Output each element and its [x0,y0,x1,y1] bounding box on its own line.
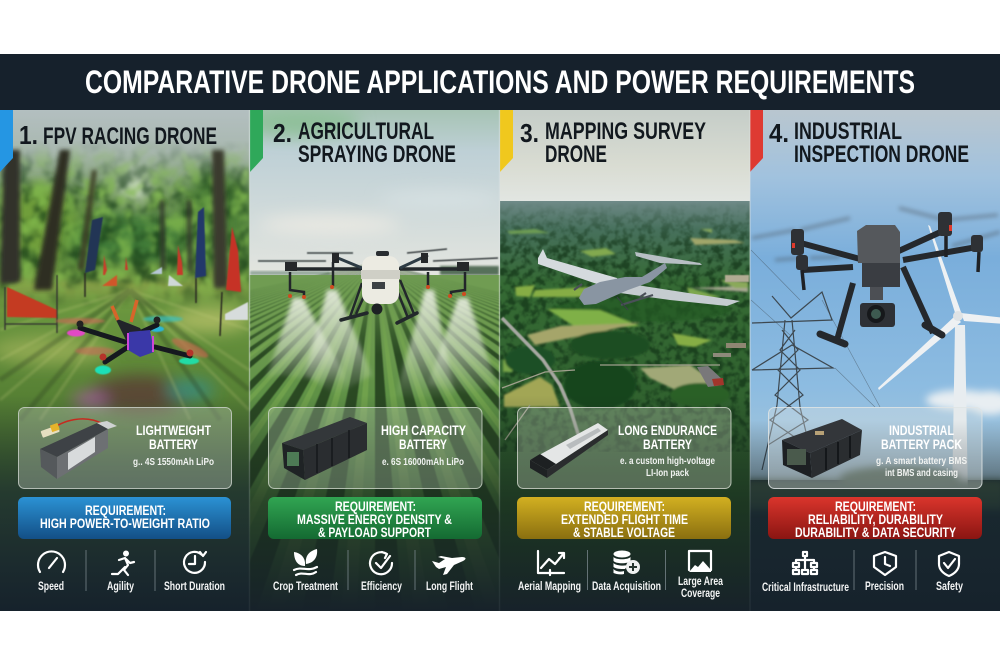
battery card: long endurance: LI-Ion pack [646,467,689,479]
feature: Large Area Coverage [678,551,723,600]
battery card: industrial pack: int BMS and casing [885,467,958,479]
battery card: high capacity [268,408,482,488]
feature: Safety: Safety [936,581,963,593]
feature: Data Acquisition: Data Acquisition [592,581,661,593]
feature: Speed: Speed [38,581,64,593]
panel: agricultural spraying drone [250,110,500,592]
feature: Long Flight: Long Flight [426,581,473,593]
requirement banner: red: REQUIREMENT: [835,499,916,514]
feature: Long Flight [426,556,473,593]
feature: Crop Treatment: Crop Treatment [273,581,338,593]
heading: 2. Agricultural Spraying Drone: AGRICULTURAL [298,118,434,145]
heading: 3. Mapping Survey Drone [520,118,706,168]
requirement banner: blue: REQUIREMENT: [85,503,166,518]
battery card: industrial pack: INDUSTRIAL [889,423,954,438]
requirement banner: green: REQUIREMENT: [335,499,416,514]
heading: 2. Agricultural Spraying Drone: 2. [273,118,292,148]
battery card: high capacity: BATTERY [399,437,447,452]
feature: Data Acquisition [592,550,661,593]
requirement banner: yellow [517,497,731,540]
feature: Short Duration: Short Duration [164,581,225,593]
scene: forest race course [0,110,250,552]
requirement banner: yellow: EXTENDED FLIGHT TIME [561,512,688,527]
bottom shade [750,426,1000,512]
heading: 1. FPV Racing Drone: 1. [19,120,38,150]
requirement banner: green [268,497,482,540]
battery card: industrial pack [768,408,982,488]
feature: Speed [38,551,65,593]
heading: 3. Mapping Survey Drone: MAPPING SURVEY [545,118,706,145]
requirement banner: blue: HIGH POWER-TO-WEIGHT RATIO [40,516,210,531]
wind turbine [878,225,1000,500]
feature: Large Area Coverage: Large Area [678,576,723,588]
corner tab: green [250,110,263,172]
heading: 4. Industrial Inspection Drone: 4. [769,118,789,148]
icon: network [793,552,817,574]
heading: 3. Mapping Survey Drone: 3. [520,118,539,148]
icon: shield check [939,552,959,576]
panel: FPV racing drone [0,110,250,611]
icon: landscape frame [689,551,711,572]
corner tab: red [750,110,763,172]
battery card: lightweight [18,408,232,488]
panel separators [249,110,751,611]
corner tab: yellow [500,110,513,172]
tree line [745,466,1000,510]
requirement banner: red [768,497,982,540]
requirement banner: red: RELIABILITY, DURABILITY [808,512,943,527]
heading: 1. FPV Racing Drone [19,120,217,150]
battery card: long endurance: LONG ENDURANCE [618,423,717,438]
feature: Large Area Coverage: Coverage [681,588,720,600]
requirement banner: yellow: REQUIREMENT: [584,499,665,514]
requirement banner: yellow: & STABLE VOLTAGE [573,525,675,540]
panel: mapping survey drone [500,110,750,611]
feature: Crop Treatment [273,549,338,593]
scene: crop field and sky [250,110,500,586]
requirement banner: green: MASSIVE ENERGY DENSITY & [297,512,452,527]
icon: slim Li-Ion pack [530,423,608,478]
scene: aerial landscape [500,110,750,554]
bottom shade [500,395,750,611]
requirement banner: red: DURABILITY & DATA SECURITY [795,525,956,540]
bottom shade [0,395,250,611]
heading: 2. Agricultural Spraying Drone [273,118,456,168]
feature: Safety [936,552,963,593]
icon: database plus [614,550,640,574]
battery card: lightweight: LIGHTWEIGHT [136,423,212,438]
battery card: long endurance: BATTERY [643,437,692,452]
battery card: industrial pack: BATTERY PACK [881,437,962,452]
battery card: lightweight: g.. 4S 1550mAh LiPo [133,456,214,468]
panel: industrial inspection drone [745,110,1000,611]
drone: FPV quadcopter [55,300,210,374]
heading: 4. Industrial Inspection Drone [769,118,969,168]
feature: Aerial Mapping [518,551,581,593]
power pylon [751,250,880,470]
feature: Efficiency [361,552,402,593]
icon: speedometer [38,551,65,572]
battery card: high capacity: HIGH CAPACITY [381,423,466,438]
battery card: high capacity: e. 6S 16000mAh LiPo [382,456,464,468]
heading: 3. Mapping Survey Drone: DRONE [545,141,607,168]
icon: shield clock [874,552,896,575]
bottom shade [249,395,500,611]
feature: Agility [107,550,134,593]
icon: LiPo battery [40,419,117,479]
requirement banner: blue [18,497,231,539]
panels backing [0,110,1000,611]
icon: large LiPo battery [282,417,367,480]
feature: Efficiency: Efficiency [361,581,402,593]
corner tab: blue [0,110,13,172]
battery card: long endurance [518,408,731,488]
feature: Precision [865,552,904,593]
heading: 1. FPV Racing Drone: FPV RACING DRONE [43,123,217,150]
icon: rugged battery case [782,419,862,478]
battery card: long endurance: e. a custom high-voltage [620,455,715,467]
icon: check circle [370,552,392,574]
drone: fixed-wing survey aircraft [538,249,740,310]
icon: line chart [538,551,564,575]
requirement banner: green: & PAYLOAD SUPPORT [318,525,432,540]
icon: airplane [432,556,466,575]
spray plumes [266,290,497,400]
feature: Agility: Agility [107,581,134,593]
feature: Short Duration [164,552,225,593]
feature: Critical Infrastructure [762,552,849,594]
icon: runner [112,550,134,575]
feature: Precision: Precision [865,581,904,593]
heading: 2. Agricultural Spraying Drone: SPRAYING DRONE [298,141,456,168]
title bar [0,54,1000,110]
drone: agricultural sprayer [258,249,498,323]
battery card: lightweight: BATTERY [149,437,198,452]
feature: Aerial Mapping: Aerial Mapping [518,581,581,593]
icon: clock [184,552,206,573]
feature: Critical Infrastructure: Critical Infrastructure [762,582,849,594]
heading: 4. Industrial Inspection Drone: INDUSTRIAL [794,118,902,145]
battery card: industrial pack: g. A smart battery BMS [876,455,967,467]
icon: leaves [294,549,317,575]
drone: industrial quadcopter [752,208,1000,344]
scene: sky, pylon and wind turbine [745,110,1000,510]
